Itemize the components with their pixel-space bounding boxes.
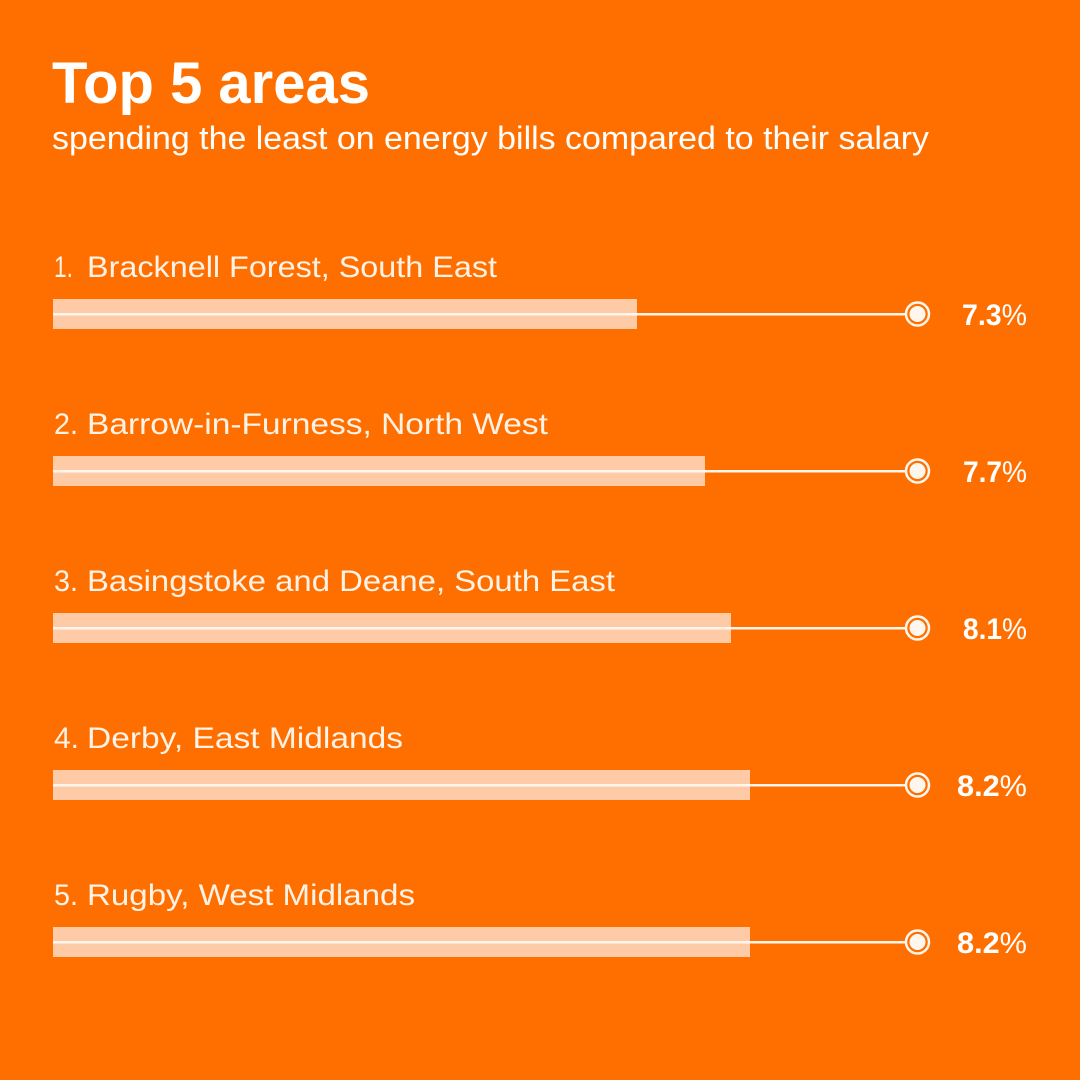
title: Top 5 areas (52, 51, 370, 116)
row 2: Barrow-in-Furness: Barrow-in-Furness, North West (87, 408, 549, 441)
row 4: Derby (53, 722, 1027, 803)
row 5: Rugby: 5. (54, 879, 78, 912)
row 5: Rugby (53, 879, 1027, 960)
row 2: Barrow-in-Furness: 7.7% (963, 456, 1027, 489)
row 1: Bracknell Forest: 1. (54, 251, 73, 284)
row 5: Rugby: 8.2% (957, 927, 1027, 960)
row 4: Derby: 4. (54, 722, 79, 755)
row 3: Basingstoke and Deane: 8.1% (963, 613, 1027, 646)
row 4: Derby: 8.2% (957, 770, 1027, 803)
row 3: Basingstoke and Deane: Basingstoke and Deane, South East (87, 565, 616, 598)
row 2: Barrow-in-Furness (53, 408, 1027, 489)
row 3: Basingstoke and Deane (53, 565, 1027, 646)
row 2: Barrow-in-Furness: 2. (54, 408, 78, 441)
row 4: Derby: Derby, East Midlands (87, 722, 403, 755)
row 1: Bracknell Forest (53, 251, 1027, 332)
row 3: Basingstoke and Deane: 3. (54, 565, 78, 598)
row 5: Rugby: Rugby, West Midlands (87, 879, 415, 912)
subtitle: spending the least on energy bills compared to their salary (52, 120, 929, 156)
row 1: Bracknell Forest: 7.3% (962, 299, 1027, 332)
row 1: Bracknell Forest: Bracknell Forest, South East (87, 251, 498, 284)
